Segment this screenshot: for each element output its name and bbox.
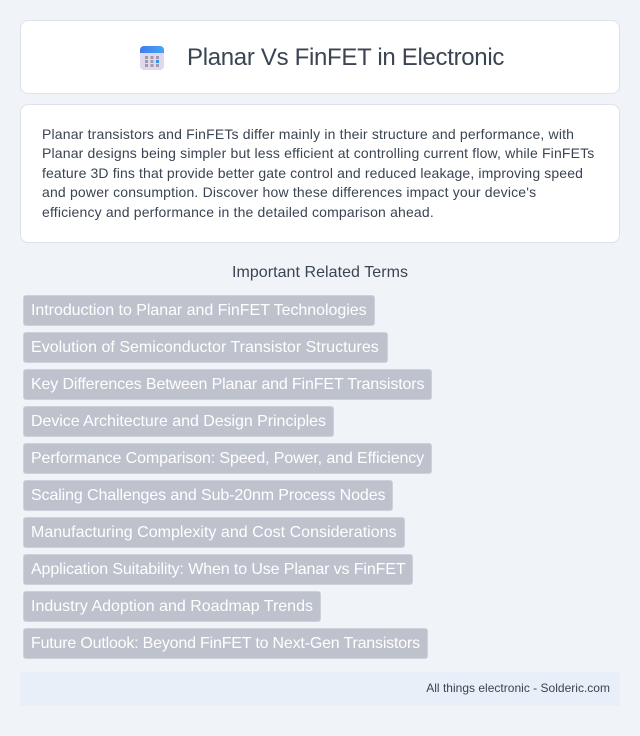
footer credit: All things electronic - Solderic.com bbox=[426, 681, 610, 695]
term tag 3 bbox=[23, 369, 432, 400]
term tag 6 bbox=[23, 480, 393, 511]
list of related terms bbox=[23, 295, 432, 659]
intro paragraph: Planar designs being simpler but less efficient at controlling current flow, while FinFETs bbox=[42, 145, 594, 161]
icon: calendar bbox=[140, 46, 164, 70]
term tag 9: Industry Adoption and Roadmap Trends bbox=[31, 598, 313, 615]
title: Planar Vs FinFET in Electronic bbox=[187, 44, 504, 71]
term tag 8: Application Suitability: When to Use Planar vs FinFET bbox=[31, 561, 406, 578]
intro paragraph: efficiency and performance in the detailed comparison ahead. bbox=[42, 204, 434, 220]
term tag 4: Device Architecture and Design Principles bbox=[31, 413, 326, 430]
term tag 8 bbox=[23, 554, 413, 585]
section heading: Important Related Terms bbox=[232, 264, 408, 281]
intro text panel bbox=[20, 104, 620, 243]
term tag 4 bbox=[23, 406, 334, 437]
term tag 1: Introduction to Planar and FinFET Technologies bbox=[31, 302, 367, 319]
term tag 9 bbox=[23, 591, 321, 622]
intro paragraph bbox=[42, 126, 594, 220]
term tag 5 bbox=[23, 443, 432, 474]
term tag 7: Manufacturing Complexity and Cost Considerations bbox=[31, 524, 397, 541]
term tag 5: Performance Comparison: Speed, Power, and Efficiency bbox=[31, 450, 424, 467]
term tag 2: Evolution of Semiconductor Transistor Structures bbox=[31, 339, 379, 356]
term tag 2 bbox=[23, 332, 388, 363]
term tag 6: Scaling Challenges and Sub-20nm Process Nodes bbox=[31, 487, 385, 504]
intro paragraph: and power consumption. Discover how these differences impact your device's bbox=[42, 184, 536, 200]
intro paragraph: feature 3D fins that provide better gate control and reduced leakage, improving speed bbox=[42, 165, 583, 181]
term tag 10: Future Outlook: Beyond FinFET to Next-Gen Transistors bbox=[31, 635, 420, 652]
intro paragraph: Planar transistors and FinFETs differ mainly in their structure and performance, with bbox=[42, 126, 574, 142]
term tag 1 bbox=[23, 295, 375, 326]
term tag 10 bbox=[23, 628, 428, 659]
footer bar bbox=[20, 672, 620, 706]
term tag 7 bbox=[23, 517, 405, 548]
term tag 3: Key Differences Between Planar and FinFET Transistors bbox=[31, 376, 424, 393]
header card bbox=[20, 20, 620, 94]
